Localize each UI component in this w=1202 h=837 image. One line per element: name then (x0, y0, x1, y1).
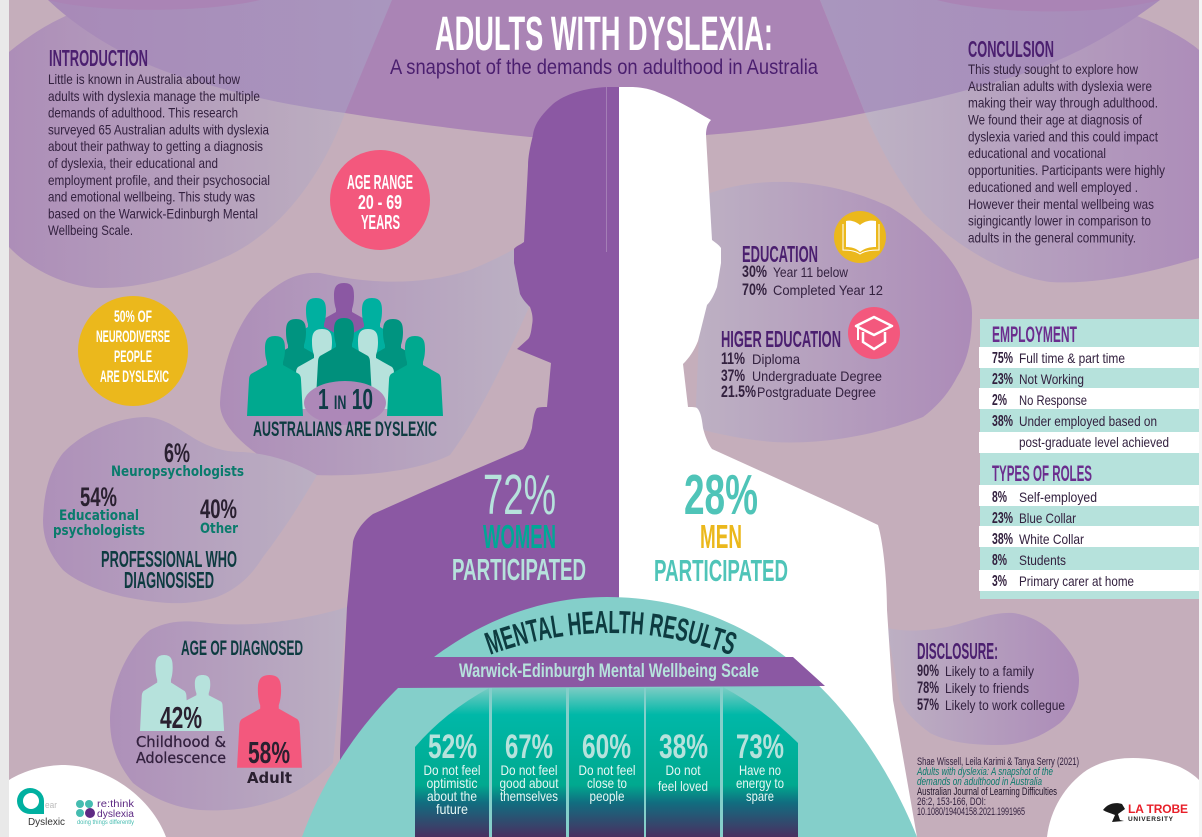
citation text block: 10.1080/19404158.2021.1991965 (917, 806, 1025, 818)
banner: Warwick-Edinburgh scale: Warwick-Edinburgh Mental Wellbeing Scale (459, 661, 759, 682)
panel: employment and types of roles: 38% (992, 531, 1013, 548)
panel: age of diagnosed: Adult (247, 769, 292, 787)
panel: professional who diagnosed (53, 438, 244, 593)
logo: Dear Dyslexic: ear (45, 800, 57, 810)
bar: 73% have no energy: 73% (736, 728, 784, 766)
panel: conclusion background blob (865, 16, 1199, 282)
conclusion text block: educationed and well employed . (968, 179, 1138, 195)
icon: adult silhouette (237, 675, 302, 768)
panel: disclosure: DISCLOSURE: (917, 638, 998, 664)
icon: crowd of people, 1 in 10 (247, 283, 443, 425)
panel: higher education: HIGER EDUCATION (721, 326, 841, 352)
panel: age of diagnosed: 42% (160, 700, 202, 735)
panel: disclosure: Likely to friends (945, 680, 1029, 696)
panel: employment and types of roles: 38% (992, 413, 1013, 430)
panel: higher education: Undergraduate Degree (752, 368, 882, 384)
panel: higher education: Diploma (752, 351, 800, 367)
women stat: 72% (483, 463, 556, 527)
panel: professional blob (43, 417, 317, 603)
introduction text block: of dyslexia, their educational and (48, 155, 218, 171)
logo: re:think dyslexia (76, 799, 135, 826)
top corner ellipse left (48, 0, 260, 10)
conclusion text block: educational and vocational (968, 145, 1106, 161)
panel: higher education: 21.5% (721, 382, 756, 401)
icon: graduation cap (848, 307, 900, 359)
panel: disclosure: Likely to a family (945, 663, 1034, 679)
panel: age of diagnosed: AGE OF DIAGNOSED (181, 637, 303, 660)
panel: education: Completed Year 12 (773, 282, 883, 298)
panel: employment and types of roles: post-graduate level achieved (1019, 434, 1169, 450)
bar: 60% do not feel close: people (590, 788, 625, 804)
silhouette: men half of the head and shoulders (619, 87, 917, 837)
bar: 38% do not feel loved: Do not (666, 762, 701, 778)
bar: 67% do not feel good: 67% (505, 728, 553, 766)
panel: professional who diagnosed: 40% (200, 494, 237, 524)
citation text block: 26:2, 153-166, DOI: (917, 796, 986, 808)
conclusion text block: making their way through adulthood. (968, 95, 1158, 111)
men stat: PARTICIPATED (654, 553, 788, 588)
heading: employment: EMPLOYMENT (992, 322, 1077, 347)
introduction text block: surveyed 65 Australian adults with dyslexia (48, 121, 269, 137)
panel: education blob (695, 182, 972, 442)
panel: employment and types of roles: 8% (992, 552, 1007, 569)
callout: age range: 20 - 69 (358, 192, 402, 214)
introduction text block: adults with dyslexia manage the multiple (48, 88, 260, 104)
panel: education: EDUCATION (742, 241, 818, 267)
bar: 52% do not feel optimistic: Do not feel (424, 762, 480, 778)
top band right (820, 0, 1160, 113)
logo: Dear Dyslexic: Dyslexic (28, 817, 65, 828)
introduction heading: INTRODUCTION (49, 45, 148, 71)
panel: employment and types of roles: 23% (992, 510, 1013, 527)
conclusion text block: opportunities. Participants were highly (968, 162, 1165, 178)
citation text block (916, 756, 1079, 818)
citation text block: Adults with dyslexia: A snapshot of the (916, 766, 1053, 778)
banner: Warwick-Edinburgh scale (390, 657, 825, 688)
callout: age range: AGE RANGE (347, 172, 413, 194)
panel: employment and types of roles: 23% (992, 371, 1013, 388)
bar: 52% do not feel optimistic: about the (427, 788, 477, 804)
callout: 50% of neurodiverse people (78, 296, 188, 406)
citation text block: Shae Wissell, Leila Karimi & Tanya Serry (2021) (917, 756, 1079, 768)
conclusion text block: adults in the general community. (968, 230, 1136, 246)
introduction text block: demands of adulthood. This research (48, 105, 238, 121)
bar: 73% have no energy: spare (746, 788, 774, 804)
panel: higher education: 11% (721, 349, 745, 368)
conclusion text block: This study sought to explore how (968, 61, 1139, 77)
logo: Dear Dyslexic (17, 788, 65, 828)
panel: age of diagnosed: Adolescence (136, 749, 226, 767)
panel: employment and types of roles: White Collar (1019, 531, 1084, 547)
heading: mental health results (curved): MENTAL HEALTH RESULTS (484, 611, 736, 654)
panel: education: 70% (742, 280, 767, 299)
top band centre (345, 0, 865, 137)
bar: 52% do not feel optimistic: 52% (428, 728, 477, 766)
bar: 60% do not feel close (569, 688, 644, 837)
logo: re:think dyslexia: re:think (97, 799, 135, 810)
callout: age range: YEARS (361, 212, 400, 234)
silhouette: women half of the head and shoulders (340, 87, 619, 837)
logo: La Trobe University (1047, 758, 1199, 837)
panel: employment and types of roles: 8% (992, 489, 1007, 506)
introduction text block (48, 45, 270, 238)
conclusion text block (968, 36, 1165, 246)
logo: re:think dyslexia: doing things differently (77, 820, 134, 826)
panel: professional who diagnosed: Neuropsychologists (111, 464, 244, 480)
panel: education: Year 11 below (773, 264, 849, 280)
bar: 60% do not feel close: Do not feel (578, 762, 636, 778)
panel: disclosure blob (887, 613, 1079, 745)
top band left (48, 0, 400, 113)
panel: employment and types of roles: Not Working (1019, 371, 1084, 387)
panel: professional who diagnosed: psychologists (53, 523, 145, 539)
panel: professional who diagnosed: Educational (59, 508, 139, 524)
conclusion text block: sigingicantly lower in comparison to (968, 213, 1151, 229)
panel: employment and types of roles: Students (1019, 552, 1066, 568)
panel: introduction background blob (9, 12, 400, 288)
panel: mental health dome (302, 597, 917, 837)
label: Australians are dyslexic: AUSTRALIANS ARE DYSLEXIC (253, 418, 437, 441)
panel: disclosure: 90% (917, 661, 939, 680)
bar: 60% do not feel close: 60% (582, 728, 631, 766)
panel: disclosure (917, 638, 1065, 714)
panel: professional who diagnosed: 54% (80, 482, 117, 512)
panel: professional who diagnosed: DIAGNOSISED (124, 567, 214, 593)
citation text block: demands on adulthood in Australia (917, 776, 1042, 788)
panel: disclosure: 57% (917, 695, 939, 714)
callout: age range (330, 150, 430, 250)
bar: 38% do not feel loved: feel loved (658, 778, 708, 794)
panel: employment and types of roles: 2% (992, 392, 1007, 409)
introduction text block: Wellbeing Scale. (48, 222, 133, 238)
bar: 52% do not feel optimistic: future (436, 801, 468, 817)
panel: employment and types of roles (979, 319, 1199, 599)
icon: open book (834, 211, 886, 263)
panel: employment and types of roles: Full time & part time (1019, 350, 1125, 366)
conclusion text block: Australian adults with dyslexia were (968, 78, 1152, 94)
panel: education (742, 211, 886, 299)
callout: 50% of neurodiverse people: PEOPLE (114, 347, 152, 366)
logo: La Trobe University: UNIVERSITY (1128, 816, 1174, 823)
panel: higher education: 37% (721, 366, 745, 385)
panel: professional who diagnosed: Other (200, 521, 238, 537)
panel: age of diagnosed: 58% (248, 735, 290, 770)
conclusion text block: dyslexia varied and this could impact (968, 128, 1158, 144)
panel: employment and types of roles: 3% (992, 573, 1007, 590)
top corner ellipse right (937, 0, 1160, 11)
panel: employment and types of roles: No Response (1019, 392, 1087, 408)
panel: professional who diagnosed: 6% (164, 438, 190, 468)
callout: 50% of neurodiverse people: 50% OF (114, 307, 152, 326)
panel: age of diagnosed: Childhood & (136, 733, 226, 751)
heading: types of roles: TYPES OF ROLES (992, 461, 1092, 486)
women stat: PARTICIPATED (452, 552, 586, 587)
panel: education: 30% (742, 262, 767, 281)
panel: one in ten blob (220, 240, 530, 475)
women stat (452, 463, 586, 587)
introduction text block: about their pathway to getting a diagnosis (48, 138, 263, 154)
women stat: WOMEN (483, 518, 556, 555)
bar: 38% do not feel loved: 38% (659, 728, 708, 766)
introduction text block: based on the Warwick-Edinburgh Mental (48, 205, 258, 221)
conclusion text block: We found their age at diagnosis of (968, 112, 1142, 128)
logos: Dear Dyslexic and re:think dyslexia (9, 765, 166, 837)
panel: disclosure: Likely to work collegue (945, 697, 1065, 713)
callout: 50% of neurodiverse people: ARE DYSLEXIC (100, 367, 169, 386)
panel: employment and types of roles: Primary carer at home (1019, 573, 1134, 589)
men stat (654, 463, 788, 588)
logo: re:think dyslexia: dyslexia (97, 809, 134, 820)
bar: 60% do not feel close: close to (587, 775, 627, 791)
introduction text block: and emotional wellbeing. This study was (48, 189, 255, 205)
panel: employment and types of roles: Blue Collar (1019, 510, 1076, 526)
bar: 52% do not feel optimistic: optimistic (426, 775, 478, 791)
panel: employment and types of roles: 75% (992, 350, 1013, 367)
bar: 52% do not feel optimistic (415, 688, 489, 837)
bar: 73% have no energy (723, 687, 798, 837)
icon: kookaburra (1103, 803, 1125, 822)
bar: 67% do not feel good: Do not feel (500, 762, 558, 778)
panel: higher education: Postgraduate Degree (757, 384, 876, 400)
bar: 67% do not feel good: good about (500, 775, 559, 791)
bar: 67% do not feel good (492, 688, 566, 837)
panel: age of diagnosed (136, 637, 303, 787)
panel: employment and types of roles: Self-employed (1019, 489, 1097, 505)
panel: age of diagnosis blob (110, 607, 347, 810)
title: ADULTS WITH DYSLEXIA: (435, 8, 773, 61)
panel: professional who diagnosed: PROFESSIONAL WHO (101, 546, 237, 572)
icon: child silhouettes (140, 655, 224, 731)
bar: 73% have no energy: energy to (736, 775, 784, 791)
logo: La Trobe University: LA TROBE (1128, 802, 1188, 816)
bar: 67% do not feel good: themselves (500, 788, 558, 804)
conclusion text block: However their mental wellbeing was (968, 196, 1154, 212)
subtitle: A snapshot of the demands on adulthood in Australia (390, 56, 818, 79)
men stat: MEN (700, 518, 742, 555)
conclusion heading: CONCULSION (968, 36, 1054, 62)
panel: employment and types of roles: Under employed based on (1019, 413, 1157, 429)
stat: 1 in 10: 1 IN 10 (318, 384, 373, 416)
introduction text block: employment profile, and their psychosocial (48, 172, 270, 188)
panel: disclosure: 78% (917, 678, 939, 697)
citation text block: Australian Journal of Learning Difficulties (917, 786, 1057, 798)
callout: 50% of neurodiverse people: NEURODIVERSE (96, 327, 170, 346)
bar: 73% have no energy: Have no (739, 762, 781, 778)
men stat: 28% (684, 463, 758, 527)
panel: higher education (721, 307, 900, 401)
bar: 38% do not feel loved (646, 688, 720, 837)
introduction text block: Little is known in Australia about how (48, 71, 241, 87)
